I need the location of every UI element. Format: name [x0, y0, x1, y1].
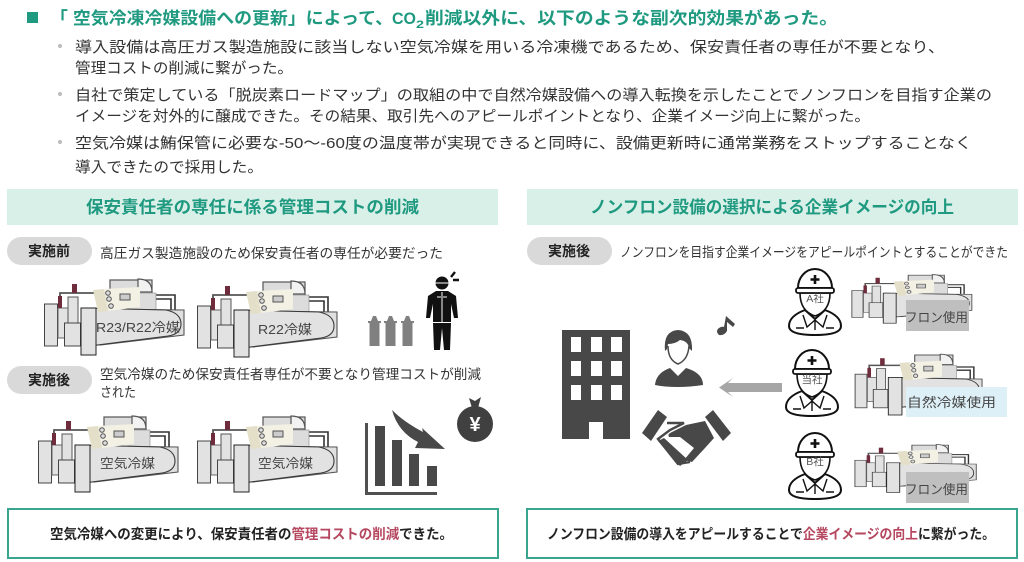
worker: own company: [786, 350, 838, 416]
worker: company A: [789, 269, 841, 335]
bulleted text block: 導入設備は高圧ガス製造施設に該当しない空気冷媒を用いる冷凍機であるため、保安責任者の専任が不要となり、: [75, 39, 945, 56]
machine: air refrigerant 1: 空気冷媒: [100, 456, 155, 471]
after label: [7, 366, 92, 394]
worker: company B: B社: [806, 455, 824, 468]
after label: [527, 237, 612, 265]
title: [27, 8, 838, 31]
after description: 空気冷媒のため保安責任者専任が不要となり管理コストが削減: [100, 366, 481, 382]
icon: business person: [655, 330, 703, 387]
arrow: toward company: [719, 378, 782, 397]
machine: company B, fluorocarbon: フロン使用: [905, 482, 968, 497]
before label: [7, 237, 92, 265]
bulleted text block: イメージを対外的に醸成できた。その結果、取引先へのアピールポイントとなり、企業イメージ向上に繋がった。: [75, 108, 870, 125]
machine: R22: R22冷媒: [258, 322, 312, 337]
machine: company B, fluorocarbon: [855, 445, 976, 503]
panel: corporate image improvement: [527, 189, 1018, 558]
title: 削減以外に、以下のような副次的効果があった。: [425, 8, 838, 28]
machine: R23/R22: [44, 279, 184, 355]
bulleted text block: 管理コストの削減に繋がった。: [75, 59, 293, 77]
panel: management cost reduction: [7, 189, 498, 558]
chart: falling cost bars: [366, 410, 445, 494]
machine: own company, natural refrigerant: [855, 354, 1007, 417]
before label: 実施前: [28, 243, 70, 259]
conclusion box: left: [8, 509, 498, 558]
worker: company A: A社: [806, 292, 824, 305]
title: 「 空気冷凍冷媒設備への更新」によって、: [50, 8, 393, 28]
worker: own company: 当社: [802, 373, 823, 386]
conclusion box: right: [527, 509, 1017, 558]
conclusion box: right: ノンフロン設備の導入をアピールすることで企業イメージの向上に繋がった。: [547, 526, 995, 542]
icon: music note: [717, 316, 735, 335]
conclusion box: left: 空気冷媒への変更により、保安責任者の管理コストの削減できた。: [50, 526, 453, 542]
worker: company B: [789, 433, 841, 499]
bulleted text block: 空気冷媒は鮪保管に必要な-50～-60度の温度帯が実現できると同時に、設備更新時に通常業務をストップすることなく: [75, 134, 972, 152]
bulleted text block: 自社で策定している「脱炭素ロードマップ」の取組の中で自然冷媒設備への導入転換を示したことでノンフロンを目指す企業の: [75, 87, 992, 104]
panel heading: right: [527, 189, 1018, 225]
title: CO: [392, 9, 416, 28]
after description: された: [100, 385, 136, 400]
bulleted text block: [58, 39, 992, 176]
icon: yen money bag: ¥: [469, 414, 481, 436]
panel heading: left: [7, 189, 498, 225]
icon: gas cylinders: [368, 316, 414, 346]
machine: air refrigerant 2: [198, 416, 337, 492]
after label: 実施後: [548, 243, 590, 259]
machine: company A, fluorocarbon: フロン使用: [905, 310, 968, 325]
icon: office building: [562, 330, 630, 439]
icon: yen money bag: [457, 397, 493, 442]
machine: company A, fluorocarbon: [852, 275, 972, 331]
machine: air refrigerant 2: 空気冷媒: [258, 456, 313, 471]
after description: [100, 366, 481, 400]
before description: 高圧ガス製造施設のため保安責任者の専任が必要だった: [100, 245, 443, 261]
icon: handshake: [642, 410, 731, 466]
machine: air refrigerant 1: [38, 416, 178, 492]
machine: own company, natural refrigerant: 自然冷媒使用: [907, 395, 996, 410]
panel heading: left: 保安責任者の専任に係る管理コストの削減: [86, 197, 419, 217]
after label: 実施後: [28, 372, 70, 388]
machine: R23/R22: R23/R22冷媒: [96, 320, 180, 335]
title: 2: [416, 19, 424, 31]
machine: R22: [198, 281, 337, 357]
bulleted text block: 導入できたので採用した。: [75, 159, 263, 176]
icon: worker in uniform: [426, 272, 459, 350]
panel heading: right: ノンフロン設備の選択による企業イメージの向上: [590, 197, 954, 217]
